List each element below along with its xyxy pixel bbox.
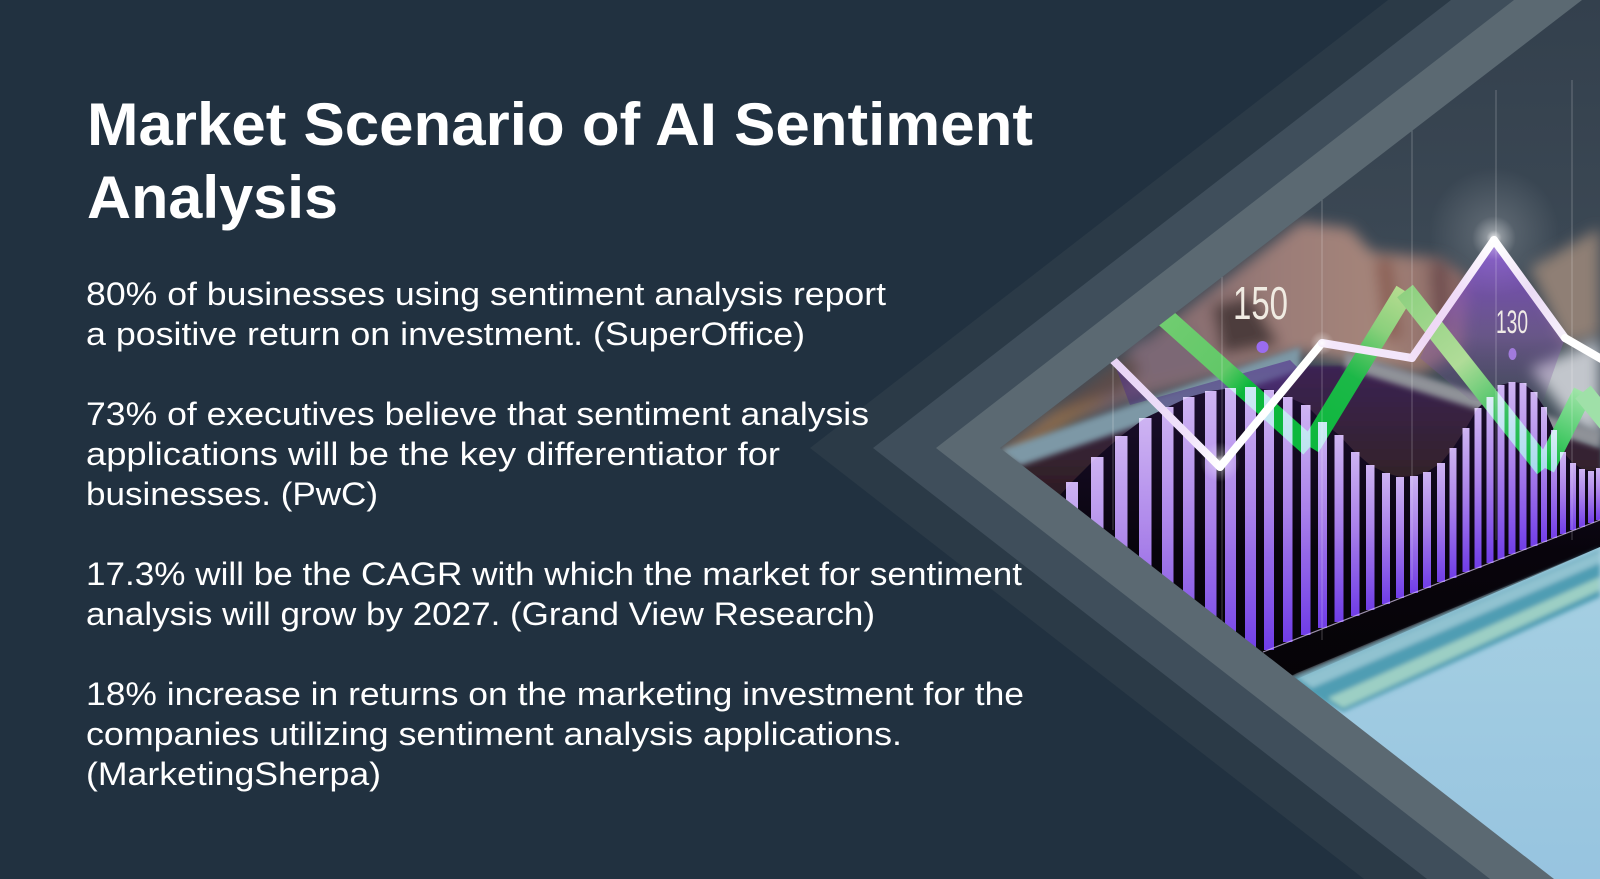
stat block: 18% marketing returns: 18% increase in returns on the marketing investment for the xyxy=(86,676,1024,712)
stat block: 18% marketing returns: (MarketingSherpa) xyxy=(86,756,381,792)
stat block: 18% marketing returns: companies utilizing sentiment analysis applications. xyxy=(86,716,902,752)
stat block: 73% executives: 73% of executives believe that sentiment analysis xyxy=(86,396,869,432)
title: Analysis xyxy=(87,164,338,231)
chevron outer band xyxy=(810,0,1600,879)
green trend line xyxy=(1130,286,1600,468)
point marker 150 xyxy=(1256,341,1268,353)
stat block: 73% executives xyxy=(86,396,869,512)
stat block: 80% positive ROI xyxy=(86,276,886,352)
stat block: 17.3% CAGR: 17.3% will be the CAGR with which the market for sentiment xyxy=(86,556,1022,592)
title: Market Scenario of AI Sentiment xyxy=(87,91,1033,158)
blurred hands xyxy=(1000,222,1600,458)
stat block: 80% positive ROI: a positive return on investment. (SuperOffice) xyxy=(86,316,805,352)
bar chart baseline xyxy=(1263,520,1600,652)
line glows xyxy=(1200,167,1559,482)
lower black tablet body xyxy=(1292,674,1294,676)
tablet screen dark area xyxy=(1016,364,1600,676)
chart value label 150: 150 xyxy=(1233,277,1288,329)
stat block: 73% executives: businesses. (PwC) xyxy=(86,476,378,512)
teal stripes xyxy=(1285,549,1600,712)
title xyxy=(87,91,1033,231)
photo backdrop xyxy=(1000,0,1600,560)
stat block: 18% marketing returns xyxy=(86,676,1024,792)
tablet edge bands xyxy=(1000,347,1600,466)
chart value label 130: 130 xyxy=(1496,304,1528,340)
stat block: 17.3% CAGR: analysis will grow by 2027. (Grand View Research) xyxy=(86,596,875,632)
dark area-chart hull xyxy=(1060,382,1600,676)
chevron middle band xyxy=(873,0,1600,879)
light blue desk surface xyxy=(1297,547,1600,879)
photo: financial chart over tablet, clipped to chevron xyxy=(1000,0,1600,879)
chevron inner band xyxy=(936,0,1600,879)
stat block: 17.3% CAGR xyxy=(86,556,1022,632)
purple bar chart xyxy=(1066,382,1600,650)
vertical grid lines xyxy=(1113,80,1572,640)
stat block: 73% executives: applications will be the key differentiator for xyxy=(86,436,780,472)
stat block: 80% positive ROI: 80% of businesses using sentiment analysis report xyxy=(86,276,886,312)
point marker 130 xyxy=(1508,348,1516,360)
white trend line xyxy=(1090,240,1600,467)
purple tint under line peaks xyxy=(1116,247,1564,408)
